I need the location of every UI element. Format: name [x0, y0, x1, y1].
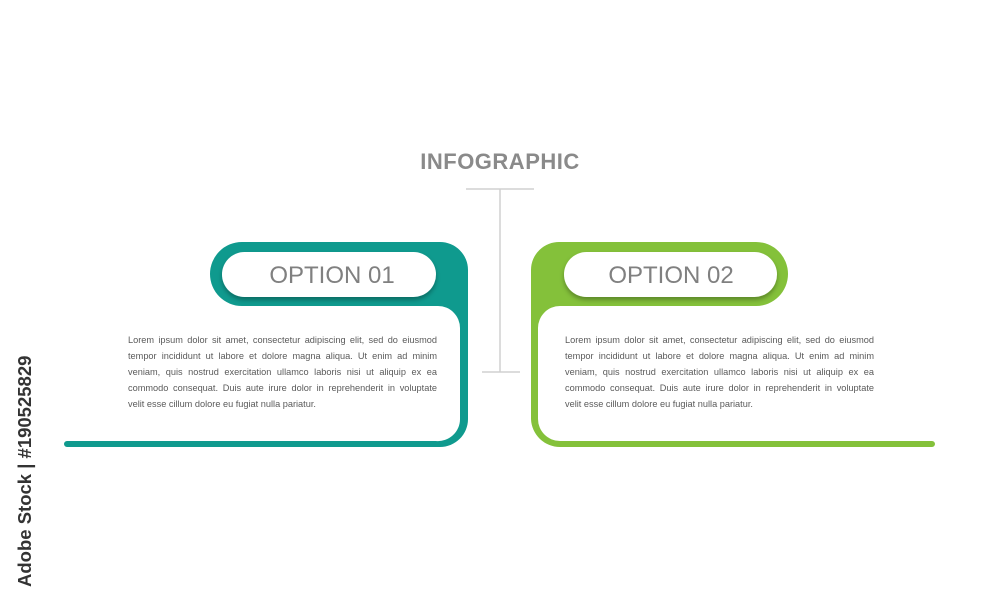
text block: option 01: veniam, quis nostrud exercitation ullamco laboris nisi ut aliquip ex ea	[128, 367, 437, 377]
text block: option 02: Lorem ipsum dolor sit amet, consectetur adipiscing elit, sed do eiusmod	[565, 335, 874, 345]
text block: option 01: Lorem ipsum dolor sit amet, consectetur adipiscing elit, sed do eiusmod	[128, 335, 437, 345]
text block: option 02	[565, 335, 874, 409]
pill: option 02: OPTION 02	[608, 262, 734, 289]
text block: option 02: veniam, quis nostrud exercitation ullamco laboris nisi ut aliquip ex ea	[565, 367, 874, 377]
text block: option 01: tempor incididunt ut labore et dolore magna aliqua. Ut enim ad minim	[128, 351, 437, 361]
text block: option 02: velit esse cillum dolore eu fugiat nulla pariatur.	[565, 399, 753, 409]
text block: option 01: velit esse cillum dolore eu fugiat nulla pariatur.	[128, 399, 316, 409]
watermark credit: Adobe Stock | #190525829	[14, 356, 35, 587]
title: INFOGRAPHIC	[420, 149, 580, 174]
text block: option 01: commodo consequat. Duis aute irure dolor in reprehenderit in voluptate	[128, 383, 437, 393]
pill: option 01	[222, 252, 436, 297]
pill: option 01: OPTION 01	[269, 262, 395, 289]
frame: green	[531, 242, 935, 447]
text block: option 02: commodo consequat. Duis aute irure dolor in reprehenderit in voluptate	[565, 383, 874, 393]
text block: option 01	[128, 335, 437, 409]
frame: teal	[64, 242, 468, 447]
text block: option 02: tempor incididunt ut labore et dolore magna aliqua. Ut enim ad minim	[565, 351, 874, 361]
pill: option 02	[564, 252, 777, 297]
